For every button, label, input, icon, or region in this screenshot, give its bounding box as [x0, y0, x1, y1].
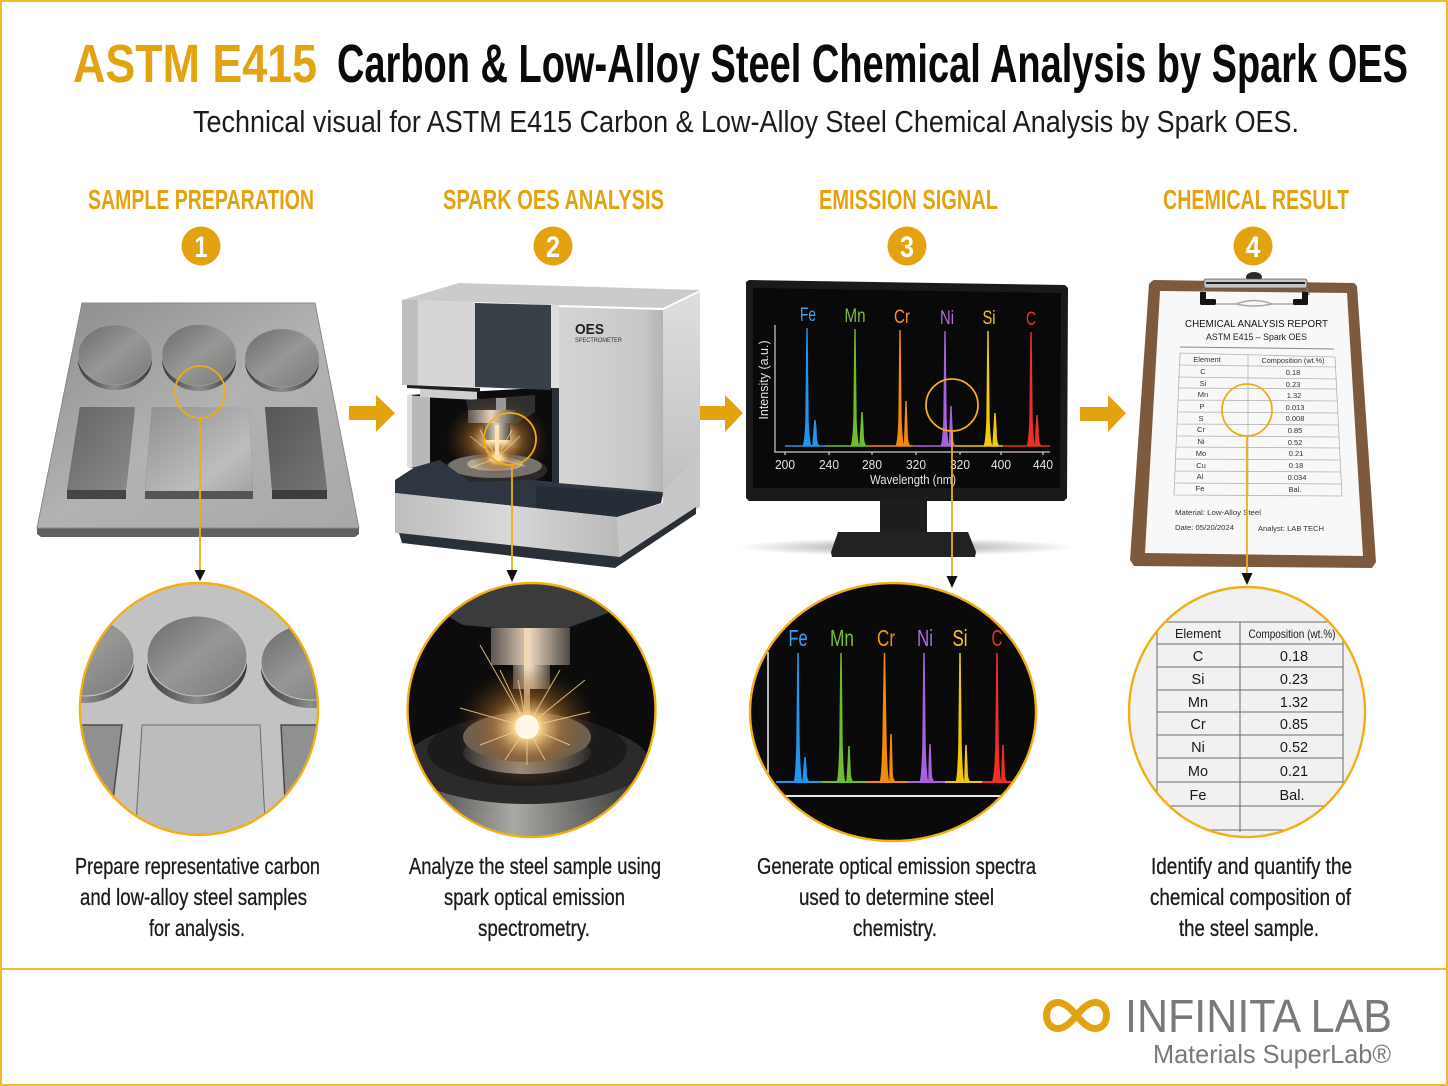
illustration: monitor with emission spectrum: Fe	[800, 305, 816, 326]
caption: chemical result: the steel sample.	[1179, 915, 1319, 941]
caption: chemical result: Identify and quantify the	[1151, 853, 1352, 879]
heading: emission signal: EMISSION SIGNAL	[819, 184, 998, 215]
caption: chemical result: chemical composition of	[1150, 884, 1351, 910]
illustration: monitor with emission spectrum: 200	[775, 458, 795, 472]
illustration: monitor with emission spectrum: 320	[950, 458, 970, 472]
caption: sample preparation: for analysis.	[149, 915, 245, 941]
illustration: monitor with emission spectrum: 440	[1033, 458, 1053, 472]
step badge 1	[182, 226, 220, 266]
detail circle 4: results table close-up: 1.32	[1280, 695, 1308, 711]
illustration: clipboard with analysis report: 0.034	[1288, 473, 1306, 482]
detail circle 4: results table close-up: Si	[1192, 672, 1204, 688]
zoom callout 1: highlight and leader	[175, 366, 225, 581]
zoom callout 3: highlight and leader	[926, 379, 978, 588]
step badge 2	[534, 226, 572, 266]
detail circle 1: sample close-up	[78, 582, 320, 836]
caption: sample preparation: and low-alloy steel samples	[80, 884, 307, 910]
step badge 3: 3	[900, 231, 914, 264]
illustration: clipboard with analysis report: P	[1199, 402, 1205, 411]
detail circle 4: results table close-up: Cr	[1190, 717, 1206, 733]
caption: emission signal: Generate optical emission spectra	[757, 853, 1036, 879]
detail circle 4: results table close-up: 0.85	[1280, 717, 1308, 733]
illustration: spark oes spectrometer: OES	[575, 321, 604, 338]
heading: chemical result: CHEMICAL RESULT	[1163, 184, 1349, 215]
illustration: clipboard with analysis report: 1.32	[1287, 391, 1301, 400]
subtitle: Technical visual for ASTM E415 Carbon & Low-Alloy Steel Chemical Analysis by Spark OES.	[193, 104, 1299, 139]
arrow: step 1 to step 2	[349, 395, 395, 432]
detail circle 2: spark close-up	[406, 582, 657, 838]
illustration: clipboard with analysis report: 0.52	[1288, 438, 1302, 447]
detail circle 3: emission spectrum close-up	[745, 578, 1041, 846]
illustration: monitor with emission spectrum: C	[1026, 309, 1036, 330]
caption: spark oes analysis	[409, 853, 661, 941]
detail circle 4: results table close-up: C	[1193, 649, 1203, 665]
illustration: monitor with emission spectrum: Intensity (a.u.)	[757, 340, 771, 420]
caption: emission signal: chemistry.	[853, 915, 937, 941]
caption: sample preparation	[75, 853, 320, 941]
detail circle 4: results table close-up: Bal.	[1280, 788, 1304, 804]
illustration: clipboard with analysis report: Date: 05/20/2024	[1175, 523, 1234, 532]
detail circle 4: results table close-up	[1125, 585, 1370, 840]
zoom callout 2: highlight and leader	[484, 413, 536, 582]
detail circle 4: results table close-up: Fe	[1190, 788, 1206, 804]
detail circle 4: results table close-up: 0.21	[1280, 764, 1308, 780]
caption: spark oes analysis: Analyze the steel sample using	[409, 853, 661, 879]
illustration: spark oes spectrometer: SPECTROMETER	[575, 338, 623, 344]
arrow: step 2 to step 3	[700, 395, 743, 432]
detail circle 3: emission spectrum close-up: Ni	[917, 625, 933, 651]
illustration: clipboard with analysis report: Bal.	[1289, 485, 1301, 494]
logo: infinita lab	[1046, 990, 1392, 1069]
detail circle 4: results table close-up: Mn	[1188, 695, 1208, 711]
illustration: clipboard with analysis report: 0.008	[1286, 414, 1304, 423]
caption: spark oes analysis: spectrometry.	[478, 915, 590, 941]
illustration: clipboard with analysis report: 0.85	[1288, 426, 1302, 435]
illustration: monitor with emission spectrum: Ni	[940, 308, 954, 329]
illustration: clipboard with analysis report: Ni	[1197, 437, 1205, 446]
illustration: spark oes spectrometer	[395, 283, 700, 568]
detail circle 3: emission spectrum close-up: Cr	[877, 625, 895, 651]
illustration: clipboard with analysis report: Si	[1200, 379, 1207, 388]
illustration: clipboard with analysis report: Mo	[1196, 449, 1206, 458]
detail circle 3: emission spectrum close-up: Mn	[830, 625, 854, 651]
illustration: monitor with emission spectrum: Wavelength (nm)	[870, 473, 956, 487]
illustration: monitor with emission spectrum	[735, 280, 1075, 557]
heading: spark oes analysis: SPARK OES ANALYSIS	[443, 184, 664, 215]
illustration: monitor with emission spectrum: 320	[906, 458, 926, 472]
illustration: clipboard with analysis report: 0.21	[1289, 449, 1303, 458]
logo: infinita lab: INFINITA LAB	[1125, 990, 1392, 1042]
detail circle 4: results table close-up: 0.52	[1280, 740, 1308, 756]
illustration: clipboard with analysis report: Fe	[1196, 484, 1204, 493]
illustration: clipboard with analysis report: 0.18	[1286, 368, 1300, 377]
detail circle 4: results table close-up: Mo	[1188, 764, 1208, 780]
illustration: steel sample plate	[37, 303, 359, 537]
illustration: clipboard with analysis report: 0.18	[1289, 461, 1303, 470]
illustration: clipboard with analysis report: Material: Low-Alloy Steel	[1175, 508, 1261, 517]
title: ASTM E415	[73, 34, 317, 94]
illustration: clipboard with analysis report: Composition (wt.%)	[1262, 356, 1325, 365]
illustration: clipboard with analysis report: Cr	[1197, 425, 1205, 434]
step badge 2: 2	[546, 231, 560, 264]
illustration: monitor with emission spectrum: 240	[819, 458, 839, 472]
detail circle 3: emission spectrum close-up: Fe	[788, 625, 808, 651]
illustration: clipboard with analysis report: ASTM E415 – Spark OES	[1206, 332, 1307, 343]
illustration: monitor with emission spectrum: Si	[982, 308, 996, 329]
illustration: monitor with emission spectrum: 280	[862, 458, 882, 472]
illustration: monitor with emission spectrum: 400	[991, 458, 1011, 472]
detail circle 4: results table close-up: Ni	[1191, 740, 1205, 756]
step badge 4	[1234, 226, 1272, 266]
detail circle 4: results table close-up: Composition (wt.%)	[1248, 627, 1336, 641]
zoom callout 4: highlight and leader	[1222, 384, 1272, 585]
illustration: clipboard with analysis report: 0.23	[1286, 380, 1300, 389]
illustration: clipboard with analysis report: Mn	[1198, 390, 1208, 399]
caption: spark oes analysis: spark optical emission	[444, 884, 625, 910]
illustration: monitor with emission spectrum: Cr	[894, 307, 911, 328]
detail circle 4: results table close-up: Element	[1175, 626, 1221, 641]
footer divider	[2, 968, 1446, 970]
caption: emission signal: used to determine steel	[799, 884, 994, 910]
detail circle 3: emission spectrum close-up: C	[992, 625, 1002, 651]
caption: sample preparation: Prepare representative carbon	[75, 853, 320, 879]
logo: infinita lab: Materials SuperLab®	[1153, 1039, 1391, 1069]
arrow: step 3 to step 4	[1080, 395, 1126, 432]
illustration: clipboard with analysis report: CHEMICAL ANALYSIS REPORT	[1185, 319, 1328, 330]
illustration: clipboard with analysis report: Analyst: LAB TECH	[1258, 524, 1324, 533]
illustration: clipboard with analysis report: Cu	[1196, 461, 1206, 470]
detail circle 4: results table close-up: 0.23	[1280, 672, 1308, 688]
step badge 3	[888, 226, 926, 266]
illustration: clipboard with analysis report: Al	[1197, 472, 1204, 481]
heading: sample preparation: SAMPLE PREPARATION	[88, 184, 314, 215]
illustration: clipboard with analysis report: Element	[1193, 355, 1222, 364]
illustration: clipboard with analysis report: 0.013	[1286, 403, 1304, 412]
detail circle 4: results table close-up: 0.18	[1280, 649, 1308, 665]
detail circle 3: emission spectrum close-up: Si	[952, 625, 968, 651]
caption: emission signal	[757, 853, 1036, 941]
illustration: clipboard with analysis report: S	[1198, 414, 1204, 423]
illustration: clipboard with analysis report: C	[1200, 367, 1206, 376]
step badge 4: 4	[1246, 231, 1261, 264]
caption: chemical result	[1150, 853, 1352, 941]
illustration: clipboard with analysis report	[1130, 272, 1376, 568]
illustration: monitor with emission spectrum: Mn	[844, 306, 866, 327]
step badge 1: 1	[194, 231, 208, 264]
